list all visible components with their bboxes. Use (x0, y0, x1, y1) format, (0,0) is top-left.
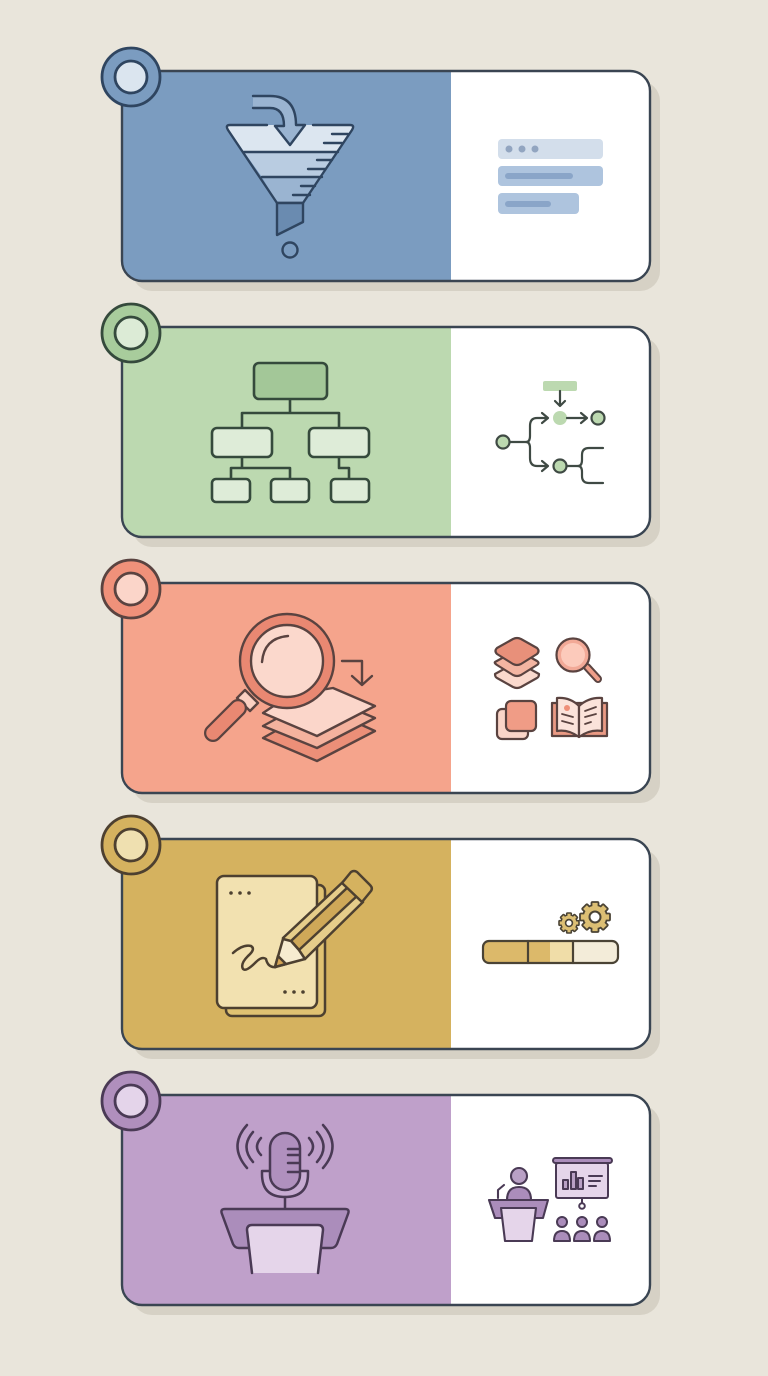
icon: open book (552, 698, 607, 737)
icon: overlapping squares (497, 701, 536, 739)
panel: card 2 hierarchy (102, 304, 660, 547)
icon: presentation board (553, 1158, 612, 1209)
icon: audience (554, 1217, 610, 1241)
icon: progress bar (483, 941, 618, 963)
icon: stacked sheets (263, 688, 375, 761)
badge: card 4 (102, 816, 160, 874)
badge: card 3 (102, 560, 160, 618)
icon: paper and pencil (217, 871, 372, 1016)
icon: layers small (495, 638, 539, 688)
panel: card 3 research (102, 560, 660, 803)
badge: card 5 (102, 1072, 160, 1130)
icon: magnifying glass (213, 614, 334, 733)
icon: speaker at lectern (489, 1168, 548, 1241)
icon: magnifier small (556, 638, 598, 679)
icon: small gear (559, 913, 579, 933)
icon: flow diagram (496, 381, 604, 483)
badge: card 1 (102, 48, 160, 106)
panel: card 1 funnel (102, 48, 660, 291)
icon: large gear (580, 902, 610, 932)
icon: form bars (498, 139, 603, 214)
panel: card 5 presentation (102, 1072, 660, 1315)
panel: card 4 writing (102, 816, 660, 1059)
arrow: into funnel (253, 96, 305, 145)
icon: org chart (212, 363, 369, 502)
icon: microphone on podium (221, 1125, 349, 1273)
icon: funnel (227, 96, 353, 258)
arrow: down into sheets (342, 661, 372, 685)
badge: card 2 (102, 304, 160, 362)
